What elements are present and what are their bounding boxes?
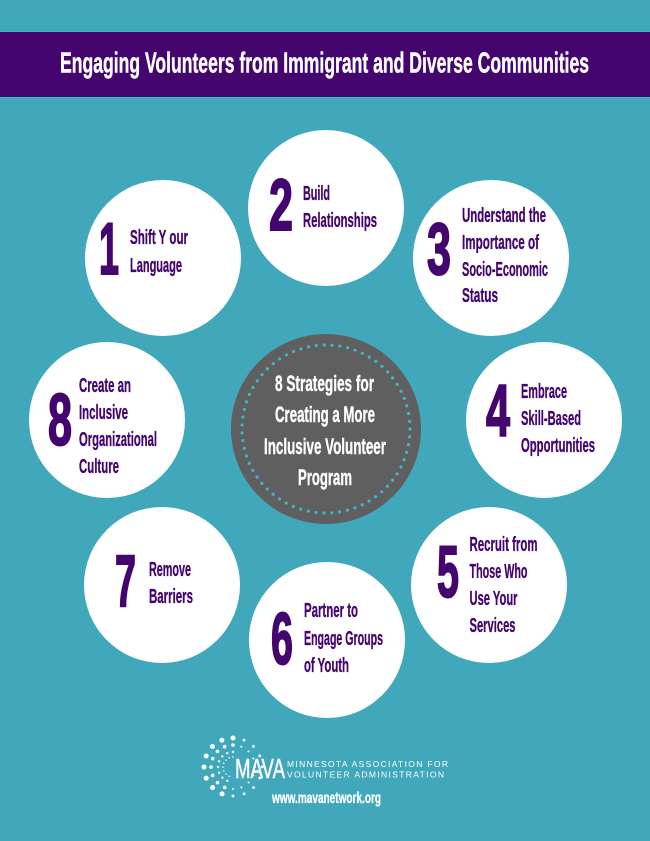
number 7: 7 (115, 541, 136, 622)
panel: strategy 2 (248, 130, 404, 286)
label 5: Recruit from (470, 534, 538, 556)
central heading: Inclusive Volunteer (264, 434, 386, 459)
label 7: Barriers (149, 586, 193, 608)
label 4: Opportunities (521, 435, 595, 457)
logo organization name: MINNESOTA ASSOCIATION FOR (287, 759, 448, 769)
number 2: 2 (269, 165, 293, 246)
label 7: Remove (149, 559, 191, 581)
label 3 (462, 205, 548, 307)
label 6 (304, 600, 383, 677)
panel: strategy 1: 1 (99, 209, 119, 290)
label 5: Those Who (470, 561, 528, 583)
number 3: 3 (427, 209, 451, 290)
number 4: 4 (486, 371, 510, 452)
label 1 (130, 227, 188, 277)
central heading: 8 Strategies for (275, 371, 374, 396)
panel: strategy 1 (85, 180, 241, 336)
logo organization name: VOLUNTEER ADMINISTRATION (287, 770, 444, 780)
website: www.mavanetwork.org (271, 790, 381, 807)
number 5: 5 (437, 532, 459, 613)
label 2: Relationships (303, 210, 377, 232)
central heading (264, 371, 386, 490)
logo wordmark: MAVA (235, 753, 285, 784)
number 8: 8 (48, 380, 72, 461)
label 8: Culture (79, 456, 119, 478)
central heading: Program (298, 465, 352, 490)
label 6: of Youth (304, 655, 349, 677)
central heading: Creating a More (275, 402, 375, 427)
label 3: Importance of (462, 232, 539, 254)
icon: radial dots (204, 738, 262, 796)
label 2: Build (303, 183, 330, 205)
panel: strategy 4 (466, 342, 622, 498)
label 4 (521, 381, 595, 457)
panel: strategy 5 (411, 507, 567, 663)
panel: strategy 7 (84, 507, 240, 663)
label 7 (149, 559, 193, 608)
label 3: Status (462, 285, 498, 307)
label 3: Understand the (462, 205, 546, 227)
label 5 (470, 534, 538, 637)
panel: strategy 8 (29, 342, 185, 498)
number 6: 6 (271, 599, 293, 680)
label 8: Organizational (79, 429, 157, 451)
label 8 (79, 375, 157, 478)
label 6: Engage Groups (304, 628, 383, 650)
panel: strategy 3 (413, 180, 569, 336)
label 5: Services (470, 615, 516, 637)
label 1: Shift Y our (130, 227, 188, 249)
label 6: Partner to (304, 600, 358, 622)
title banner (0, 31, 650, 98)
label 8: Create an (79, 375, 131, 397)
label 1: Language (130, 255, 182, 277)
label 2 (303, 183, 377, 232)
logo organization name (287, 759, 448, 780)
panel: strategy 6 (249, 562, 405, 718)
panel: central hub (231, 334, 421, 524)
label 4: Embrace (521, 381, 567, 403)
logo: MAVA (204, 738, 448, 807)
label 8: Inclusive (79, 402, 128, 424)
label 3: Socio-Economic (462, 259, 548, 281)
label 4: Skill-Based (521, 408, 581, 430)
label 5: Use Your (470, 588, 518, 610)
